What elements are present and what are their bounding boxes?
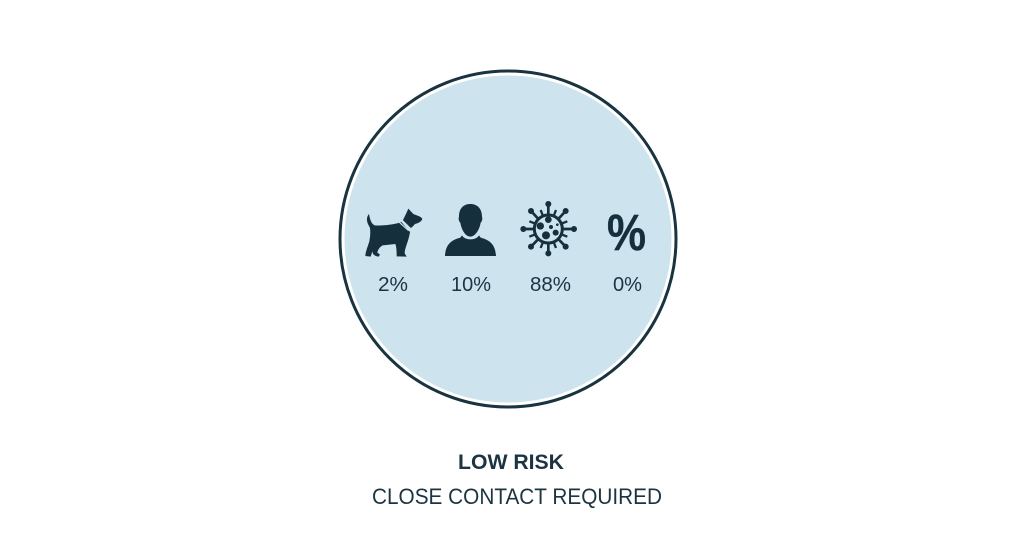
risk circle [340, 71, 676, 407]
heading: low risk: LOW RISK [458, 450, 564, 474]
value: dog 2%: 2% [378, 274, 408, 296]
value: person 10%: 10% [451, 274, 491, 296]
icon: dog [365, 209, 422, 257]
icon: percent sign: % [607, 204, 646, 261]
subheading: close contact required: CLOSE CONTACT REQUIRED [372, 484, 662, 509]
icon: virus [520, 201, 577, 256]
value: percent 0%: 0% [613, 274, 642, 296]
icon: person [445, 204, 496, 256]
value: virus 88%: 88% [530, 274, 571, 296]
